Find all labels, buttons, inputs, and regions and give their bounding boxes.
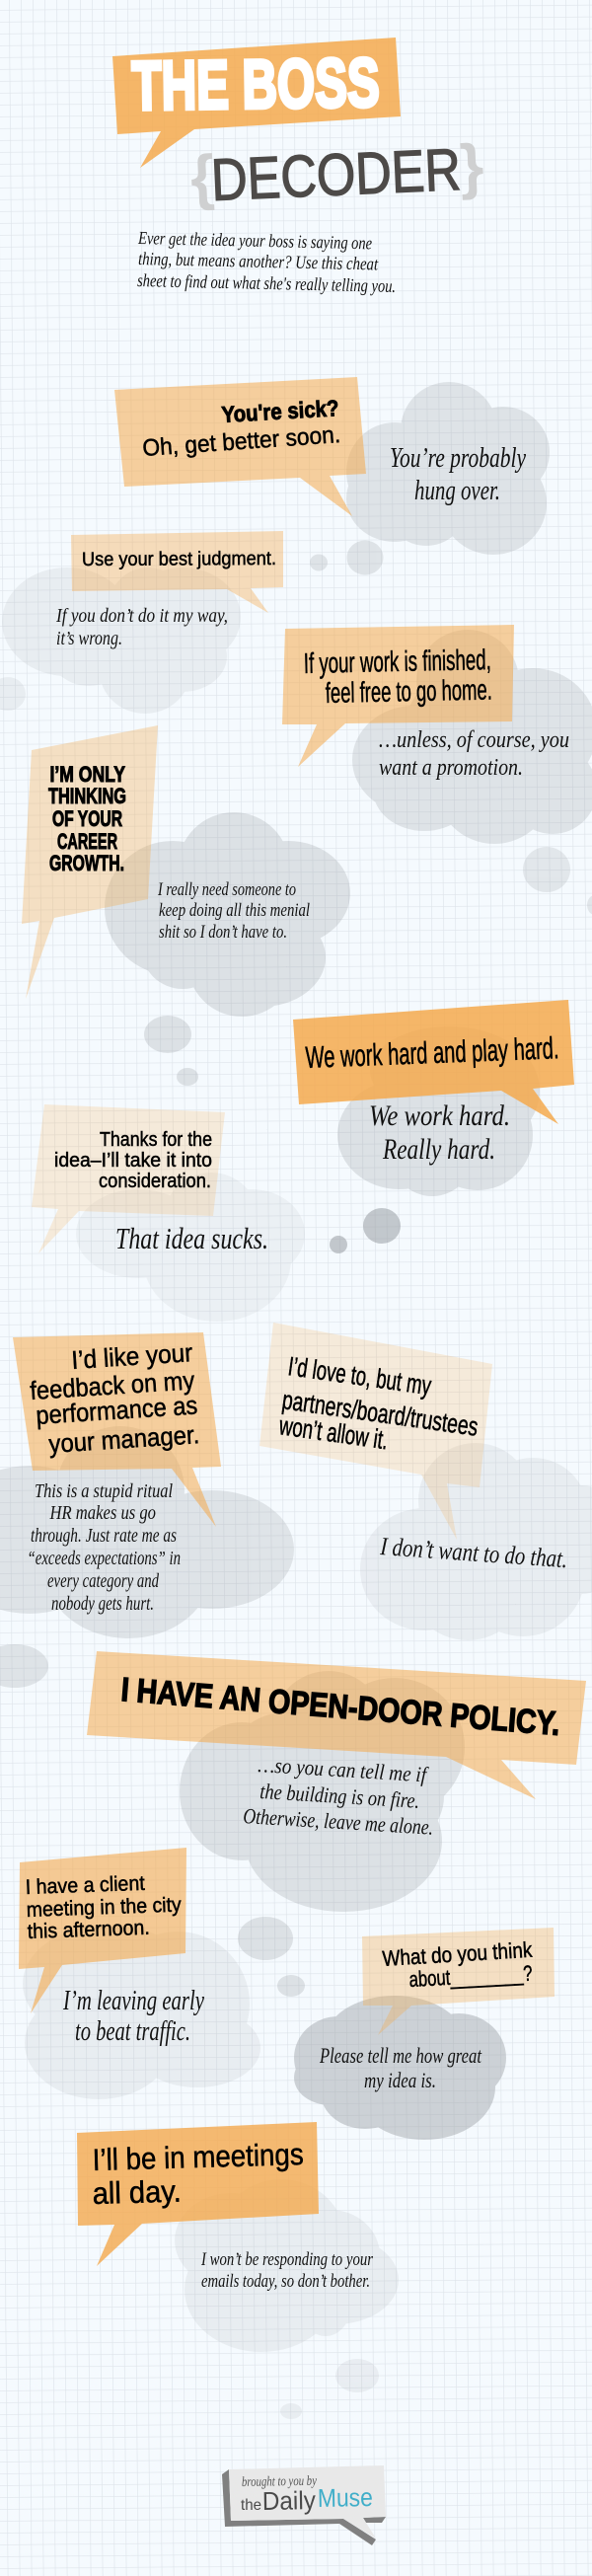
- cloud text: [319, 2043, 482, 2092]
- cloud text: [243, 1752, 434, 1840]
- cloud text: If you don’t do it my way,: [55, 605, 228, 627]
- cloud: [0, 1426, 294, 1688]
- panel: work hard: [293, 1000, 574, 1253]
- thought circles: [523, 847, 592, 915]
- bubble: [22, 725, 158, 999]
- panel: client meeting: [19, 1848, 305, 2099]
- cloud: [76, 1173, 305, 1322]
- bubble text: about________?: [408, 1960, 533, 1992]
- cloud: [105, 812, 350, 1017]
- cloud text: You’re probably: [390, 443, 526, 474]
- bubble text: [303, 644, 492, 710]
- bubble text: performance as: [35, 1390, 198, 1430]
- bubble text: your manager.: [47, 1419, 200, 1459]
- panel: what do you think: [294, 1928, 555, 2140]
- cloud: [0, 568, 241, 714]
- bubble: [293, 1000, 574, 1124]
- bubble: [87, 1651, 586, 1799]
- cloud: [294, 1996, 506, 2140]
- panel: love to: [259, 1323, 592, 1640]
- left brace: {: [189, 143, 216, 212]
- bubble text: You're sick?: [221, 395, 339, 427]
- bubble text: GROWTH.: [49, 851, 124, 875]
- panel: open-door policy: [87, 1651, 586, 1912]
- logo text: [241, 2474, 373, 2516]
- logo text: brought to you by: [242, 2474, 318, 2490]
- cloud text: “exceeds expectations” in: [28, 1549, 181, 1569]
- cloud: [346, 382, 550, 555]
- cloud: [360, 1443, 592, 1640]
- cloud text: my idea is.: [364, 2068, 436, 2092]
- cloud text: emails today, so don’t bother.: [201, 2271, 370, 2292]
- bubble text: If your work is finished,: [303, 644, 491, 680]
- cloud text: it’s wrong.: [56, 628, 122, 649]
- cloud text: Otherwise, leave me alone.: [243, 1803, 434, 1840]
- cloud text: …so you can tell me if: [258, 1752, 429, 1787]
- cloud text: That idea sucks.: [115, 1221, 268, 1255]
- panel: meetings all day: [77, 2122, 399, 2419]
- bubble text: Use your best judgment.: [82, 548, 276, 570]
- cloud text: Please tell me how great: [319, 2043, 482, 2068]
- bubble: [71, 531, 283, 613]
- thought circles: [330, 1208, 401, 1253]
- panel: you're sick: [114, 377, 550, 574]
- bubble text: [29, 1337, 200, 1459]
- bubble text: I’ll be in meetings: [92, 2137, 304, 2177]
- bubble text: I’M ONLY: [49, 762, 125, 787]
- bubble text: all day.: [92, 2173, 182, 2211]
- bubble text: consideration.: [99, 1171, 211, 1192]
- thought circles: [144, 1016, 198, 1086]
- cloud text: [200, 2249, 373, 2292]
- thought circles: [310, 541, 383, 574]
- intro text: sheet to find out what she's really telling you.: [137, 271, 396, 297]
- heading: Decoder: DECODER: [210, 136, 462, 213]
- bubble text: [142, 395, 341, 462]
- bubble text: [54, 1129, 212, 1192]
- right brace: }: [459, 132, 485, 201]
- cloud text: [369, 1099, 510, 1166]
- cloud text: [28, 1481, 181, 1615]
- bubble text: OF YOUR: [52, 806, 122, 831]
- bubble: [282, 625, 514, 767]
- cloud text: Really hard.: [382, 1133, 495, 1166]
- cloud text: keep doing all this menial: [159, 900, 310, 921]
- bubble text: this afternoon.: [27, 1917, 150, 1943]
- bubble text: Thanks for the: [100, 1129, 212, 1151]
- cloud text: [55, 605, 228, 649]
- panel: feedback: [0, 1332, 294, 1688]
- cloud: [23, 1925, 260, 2099]
- logo text: Daily: [262, 2485, 316, 2516]
- bubble: [32, 1104, 225, 1253]
- bubble: [13, 1332, 221, 1527]
- bubble text: [25, 1872, 183, 1943]
- intro text: [137, 229, 396, 297]
- bubble: [77, 2122, 319, 2266]
- bubble text: feel free to go home.: [325, 674, 492, 710]
- cloud text: every category and: [47, 1571, 159, 1592]
- bubble: [19, 1848, 186, 2013]
- logo: brought to you by the Daily Muse: [222, 2465, 386, 2545]
- cloud text: to beat traffic.: [75, 2016, 190, 2047]
- cloud text: I’m leaving early: [62, 1986, 204, 2016]
- cloud text: through. Just rate me as: [31, 1526, 177, 1547]
- thought circles: [280, 2359, 379, 2419]
- panel: work is finished: [282, 625, 592, 915]
- bubble text: THINKING: [48, 784, 126, 808]
- logo text: Muse: [318, 2482, 373, 2513]
- cloud text: want a promotion.: [379, 755, 523, 781]
- bubble text: [48, 762, 126, 875]
- logo text: the: [241, 2497, 261, 2514]
- bubble: [362, 1928, 555, 2035]
- panel: best judgment: [0, 531, 283, 714]
- bubble text: idea–I’ll take it into: [54, 1150, 212, 1172]
- bubble text: [92, 2137, 304, 2211]
- cloud: [352, 630, 592, 844]
- cloud text: [62, 1986, 204, 2047]
- intro text: thing, but means another? Use this cheat: [138, 250, 379, 275]
- bubble text: I’d love to, but my: [286, 1351, 433, 1401]
- cloud text: the building is on fire.: [259, 1779, 420, 1813]
- thought circles: [238, 1917, 305, 1997]
- title: [112, 38, 485, 213]
- cloud text: hung over.: [414, 476, 500, 506]
- bubble: [259, 1323, 492, 1540]
- title bubble: [112, 38, 401, 168]
- bubble text: [382, 1937, 534, 1992]
- cloud text: This is a stupid ritual: [35, 1481, 173, 1502]
- cloud: [337, 1026, 540, 1196]
- bubble text: won’t allow it.: [276, 1410, 390, 1455]
- bubble text: partners/board/trustees: [280, 1385, 480, 1442]
- bubble text: meeting in the city: [26, 1894, 183, 1922]
- panel: career growth: [22, 725, 350, 1086]
- logo side: [222, 2469, 386, 2545]
- bubble text: I have a client: [25, 1872, 145, 1899]
- cloud: [180, 1671, 465, 1912]
- panel: thanks for the idea: [32, 1104, 305, 1322]
- cloud: [175, 2179, 399, 2352]
- bubble text: [276, 1351, 480, 1455]
- cloud text: I really need someone to: [157, 879, 296, 900]
- cloud text: We work hard.: [369, 1099, 510, 1132]
- bubble: [114, 377, 366, 516]
- cloud text: I won’t be responding to your: [200, 2249, 373, 2270]
- cloud text: shit so I don’t have to.: [159, 922, 287, 943]
- bubble text: What do you think: [382, 1937, 534, 1971]
- cloud text: nobody gets hurt.: [51, 1594, 154, 1615]
- cloud text: [157, 879, 310, 943]
- bubble text: CAREER: [57, 829, 117, 854]
- intro text: Ever get the idea your boss is saying one: [137, 229, 372, 254]
- bubble text: feedback on my: [29, 1365, 195, 1405]
- cloud text: HR makes us go: [49, 1503, 156, 1524]
- cloud text: [379, 727, 569, 781]
- bubble text: Oh, get better soon.: [142, 421, 341, 462]
- logo face: [229, 2465, 386, 2538]
- bubble text: I’d like your: [70, 1337, 193, 1375]
- cloud text: [390, 443, 526, 506]
- heading: The Boss: THE BOSS: [131, 44, 380, 124]
